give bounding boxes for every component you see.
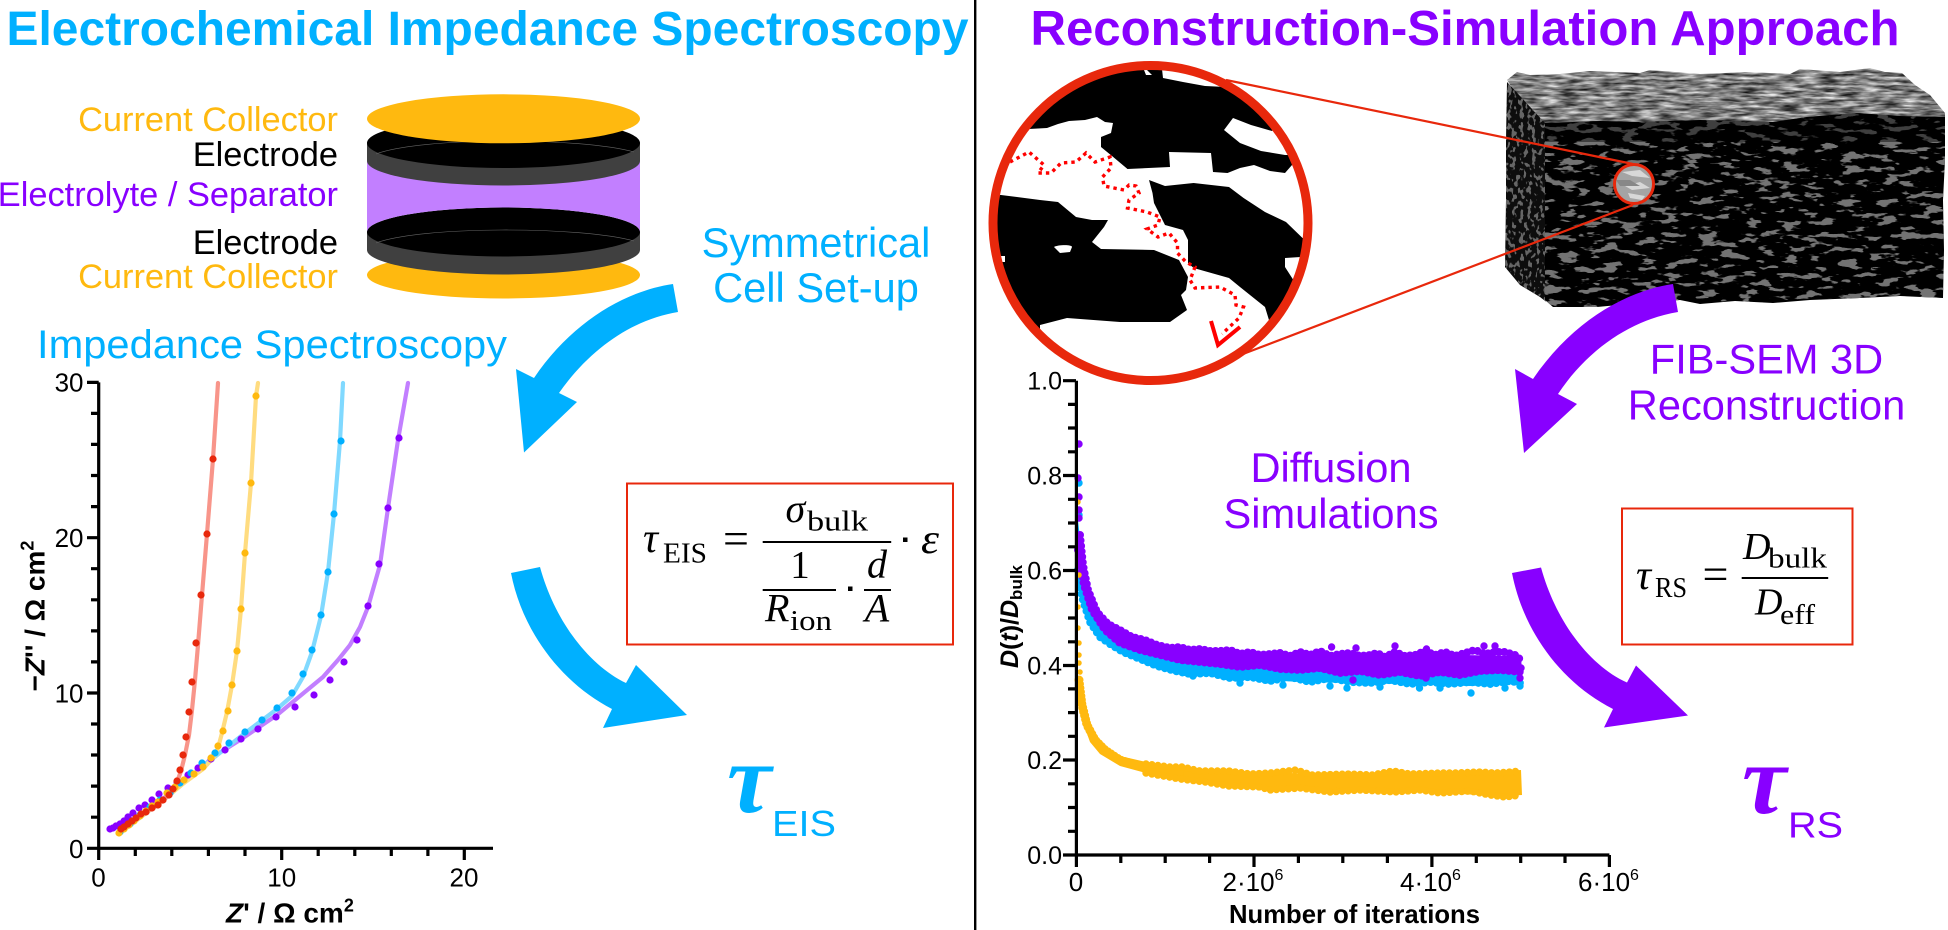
y tick labels: 1.0 xyxy=(1027,368,1062,396)
x tick labels: 20 xyxy=(450,862,478,892)
label: symmetrical cell set-up: Cell Set-up xyxy=(713,264,919,311)
series fit lines xyxy=(118,383,408,833)
cell: lower electrode xyxy=(367,208,640,274)
formula box: tau EIS: EIS xyxy=(663,538,707,570)
y tick labels: 0.6 xyxy=(1027,558,1062,586)
y axis title: bulk xyxy=(1007,564,1026,600)
series blue xyxy=(1078,483,1521,693)
black solid phase blobs xyxy=(998,70,1303,329)
x tick labels: 4·10 xyxy=(1400,867,1452,897)
cell: upper electrode xyxy=(367,118,640,186)
formula box: tau EIS: 1 xyxy=(790,544,810,586)
chart: Nyquist plot xyxy=(18,368,493,928)
label: symmetrical cell set-up xyxy=(702,219,930,311)
x tick labels: 10 xyxy=(267,862,296,892)
label: impedance spectroscopy: Impedance Spectroscopy xyxy=(37,323,507,367)
y axis title: −Z'' / Ω cm xyxy=(20,551,50,691)
formula box: tau RS xyxy=(1622,508,1852,644)
series data points xyxy=(110,396,399,833)
divider between methods xyxy=(974,0,976,930)
formula box: tau RS: eff xyxy=(1780,599,1815,631)
y tick labels: 20 xyxy=(55,523,84,553)
x tick labels xyxy=(1069,867,1639,897)
diffusion path arrowhead xyxy=(1211,321,1240,345)
y tick labels: 0 xyxy=(69,834,84,864)
chart: diffusion coefficient vs iterations xyxy=(996,368,1639,929)
block: left face xyxy=(1504,80,1546,310)
title: Electrochemical Impedance Spectroscopy: Electrochemical Impedance Spectroscopy xyxy=(6,3,969,56)
panel: FIB-SEM 3D reconstruction block xyxy=(1504,66,1947,310)
x tick labels: 6 xyxy=(1275,867,1284,884)
label: current collector bottom: Current Collector xyxy=(78,258,338,296)
x tick labels xyxy=(91,862,478,892)
formula box: tau EIS: ion xyxy=(790,605,833,637)
label: FIB-SEM 3D reconstruction: Reconstruction xyxy=(1628,382,1905,428)
cell labels xyxy=(0,101,338,296)
axes and ticks xyxy=(1063,381,1609,867)
cell: lower current collector xyxy=(367,252,640,298)
label: electrolyte separator: Electrolyte / Separator xyxy=(0,176,338,214)
magnified pore structure xyxy=(988,61,1312,385)
arrow: reconstruction to simulations xyxy=(1515,284,1678,453)
red magnifier ring xyxy=(993,66,1308,380)
result: tau RS: RS xyxy=(1788,804,1843,846)
y tick labels: 0.8 xyxy=(1027,462,1062,490)
label: symmetrical cell set-up: Symmetrical xyxy=(702,219,930,266)
block: top face xyxy=(1505,66,1947,126)
label: FIB-SEM 3D reconstruction: FIB-SEM 3D xyxy=(1650,336,1883,382)
formula box: tau RS: τ xyxy=(1636,553,1653,599)
y tick labels: 0.4 xyxy=(1027,652,1062,680)
cell: upper current collector xyxy=(367,94,640,143)
formula box: tau EIS: τ xyxy=(643,516,660,562)
formula box: tau EIS: ε xyxy=(921,517,939,563)
y axis title: D(t)/D xyxy=(996,600,1024,668)
label: FIB-SEM 3D reconstruction xyxy=(1628,336,1905,428)
formula box: tau EIS: R xyxy=(764,586,789,630)
x tick labels: 6·10 xyxy=(1578,867,1630,897)
x tick labels: 6 xyxy=(1452,867,1461,884)
y tick labels xyxy=(1027,368,1062,870)
label: current collector top: Current Collector xyxy=(78,101,338,139)
x tick labels: 6 xyxy=(1630,867,1639,884)
label: diffusion simulations: Diffusion xyxy=(1250,444,1412,491)
result: tau EIS: τ xyxy=(727,723,774,834)
arrow: spectroscopy to tortuosity xyxy=(511,567,687,728)
formula box: tau EIS: σ xyxy=(786,486,806,531)
x tick labels: 2·10 xyxy=(1222,867,1275,897)
region marker on block xyxy=(1614,164,1654,204)
panel: symmetrical cell stack xyxy=(367,94,640,298)
y tick labels: 30 xyxy=(55,368,84,398)
formula box: tau EIS: bulk xyxy=(807,506,869,538)
result: tau EIS xyxy=(727,723,836,844)
x tick labels: 0 xyxy=(91,862,106,892)
formula box: tau EIS: = xyxy=(723,513,749,564)
x axis title: Number of iterations xyxy=(1229,901,1480,929)
label: diffusion simulations: Simulations xyxy=(1224,490,1438,537)
series yellow xyxy=(1078,502,1522,797)
result: tau RS: τ xyxy=(1742,724,1789,835)
arrow: cell to impedance spectroscopy xyxy=(516,284,678,452)
result: tau EIS: EIS xyxy=(772,803,836,844)
formula box: tau RS: bulk xyxy=(1768,542,1828,574)
formula box: tau EIS: d xyxy=(867,542,888,586)
x axis title: 2 xyxy=(344,896,354,916)
block: front face xyxy=(1545,110,1947,310)
simulated diffusion path xyxy=(1010,152,1244,334)
formula box: tau EIS xyxy=(627,484,953,644)
y tick labels: 10 xyxy=(55,678,84,708)
zoom connector lines xyxy=(1226,80,1633,354)
formula box: tau RS: = xyxy=(1703,548,1728,600)
y tick labels xyxy=(55,368,84,864)
label: electrode bottom: Electrode xyxy=(193,224,338,262)
formula box: tau RS: D xyxy=(1742,526,1770,568)
y axis title: 2 xyxy=(18,541,38,551)
series purple xyxy=(1078,444,1522,680)
title: Reconstruction-Simulation Approach: Reconstruction-Simulation Approach xyxy=(1030,2,1900,56)
x tick labels: 0 xyxy=(1069,867,1083,897)
y tick labels: 0.2 xyxy=(1027,747,1062,775)
formula box: tau RS: D xyxy=(1754,582,1782,624)
y tick labels: 0.0 xyxy=(1027,842,1062,870)
label: electrode top: Electrode xyxy=(193,136,338,174)
formula box: tau EIS: A xyxy=(862,586,890,630)
x axis title: Z' / Ω cm xyxy=(226,898,344,928)
formula box: tau RS: RS xyxy=(1655,572,1687,604)
axes and ticks xyxy=(87,382,493,860)
result: tau RS xyxy=(1742,724,1843,846)
arrow: simulations to tortuosity xyxy=(1512,568,1688,728)
white disk xyxy=(994,66,1308,380)
cell: electrolyte separator xyxy=(367,161,640,232)
label: diffusion simulations xyxy=(1224,444,1438,537)
